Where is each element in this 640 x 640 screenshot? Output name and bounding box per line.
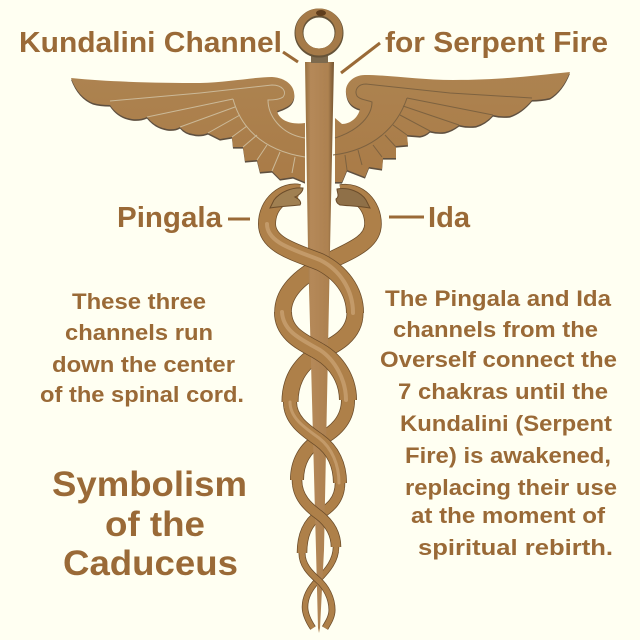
left wing — [71, 77, 305, 184]
label: for Serpent Fire: for Serpent Fire — [385, 27, 608, 59]
front serpent sections — [267, 193, 355, 628]
text block: Pingala and Ida explanation: The Pingala and Ida — [385, 286, 612, 311]
title: Symbolism — [52, 465, 247, 504]
right serpent head — [336, 189, 370, 208]
staff shaft — [305, 62, 334, 633]
title: Caduceus — [63, 544, 238, 583]
pointer line: Kundalini Channel — [283, 52, 298, 62]
text block: Pingala and Ida explanation: spiritual rebirth. — [418, 535, 613, 560]
text block: Pingala and Ida explanation: Kundalini (Serpent — [400, 411, 613, 436]
pointer line: Ida — [389, 216, 424, 218]
text block: Pingala and Ida explanation: replacing their use — [405, 475, 617, 500]
caduceus staff illustration — [71, 10, 570, 633]
text block: Pingala and Ida explanation: 7 chakras until the — [398, 379, 608, 404]
right wing — [333, 72, 570, 184]
text block: Pingala and Ida explanation: Overself connect the — [380, 347, 617, 372]
label: Pingala: Pingala — [117, 202, 223, 234]
text block: Pingala and Ida explanation — [380, 286, 617, 560]
text block: Pingala and Ida explanation: Fire) is awakened, — [405, 443, 611, 468]
pointer line: Pingala — [228, 218, 250, 220]
text block: three channels: of the spinal cord. — [40, 382, 244, 407]
back serpent sections — [283, 193, 373, 628]
pointer line: for Serpent Fire — [341, 43, 380, 73]
title — [52, 465, 247, 583]
text block: three channels — [40, 289, 244, 407]
text block: Pingala and Ida explanation: channels from the — [393, 317, 598, 342]
label: Ida: Ida — [428, 202, 471, 234]
text block: Pingala and Ida explanation: at the moment of — [411, 503, 606, 528]
ring and neck — [299, 10, 339, 63]
label: Kundalini Channel: Kundalini Channel — [19, 27, 282, 59]
text block: three channels: channels run — [65, 320, 213, 345]
text block: three channels: These three — [72, 289, 206, 314]
text block: three channels: down the center — [52, 352, 235, 377]
left serpent head — [270, 188, 303, 208]
title: of the — [105, 505, 205, 544]
